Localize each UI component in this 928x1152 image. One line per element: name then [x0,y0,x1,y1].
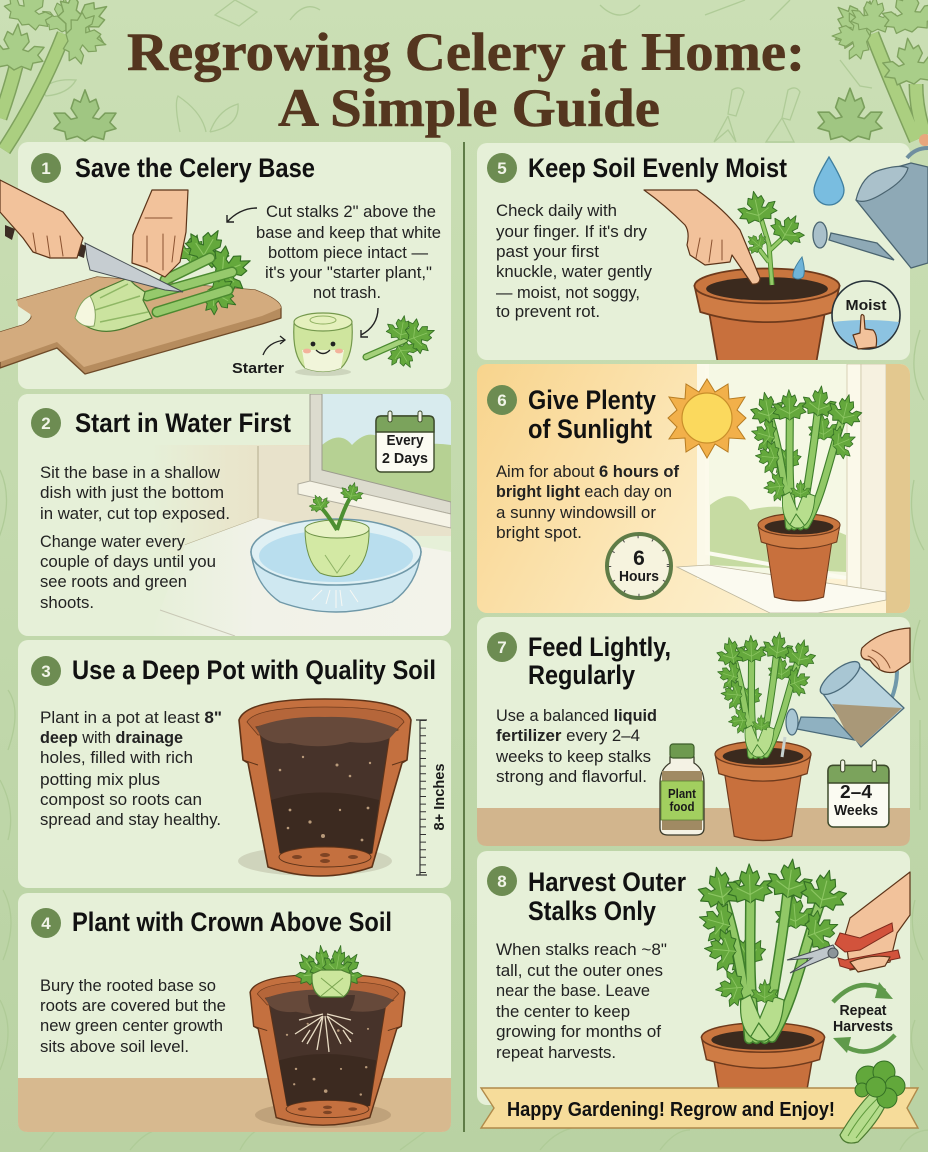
heading 1: Save the Celery Base [75,153,315,183]
panel 8: harvest outer stalks only [477,851,911,1105]
banner: happy gardening: Happy Gardening! Regrow and Enjoy! [507,1099,835,1121]
instruction text 5: — moist, not soggy, [496,283,640,302]
cutaway pot [238,699,411,876]
title: Regrowing Celery at Home: [127,22,805,82]
instruction text 5: to prevent rot. [496,302,600,321]
instruction text 4: roots are covered but the [40,996,226,1015]
starter label [232,336,285,377]
arrow to celery [227,208,257,222]
hand with pruning shears [787,872,910,973]
calendar: every 2 days: Every [386,432,424,449]
hand pointing into soil [644,190,760,284]
instruction text 8: When stalks reach ~8" [496,940,667,959]
heading 3: Use a Deep Pot with Quality Soil [72,655,436,685]
panel 4: plant with crown above soil [18,893,451,1132]
instruction text 2 [40,463,230,612]
pot with rooted crown [250,943,405,1128]
clock: 6 hours: Hours [619,568,659,585]
instruction text 3: compost so roots can [40,790,202,809]
instruction text 4: sits above soil level. [40,1037,189,1056]
clock: 6 hours [607,534,671,598]
instruction text 2: dish with just the bottom [40,483,224,502]
heading 5: Keep Soil Evenly Moist [528,153,787,183]
instruction text 3: spread and stay healthy. [40,810,221,829]
sunny window scene [677,364,910,613]
hand: holding celery [132,190,188,277]
plant food bottle: food [670,799,695,814]
instruction text 1: it's your "starter plant," [265,263,432,282]
hand and fertilizer can [782,628,910,757]
instruction text 3: potting mix plus [40,770,160,789]
badge 2 [31,408,61,438]
instruction text 8: near the base. Leave [496,981,650,1000]
instruction text 3: Plant in a pot at least 8" [40,708,222,727]
instruction text 4 [40,976,226,1056]
heading 7 [528,632,671,690]
badge 7 [487,632,517,662]
instruction text 1: bottom piece intact — [268,243,428,262]
terracotta pot [693,268,841,360]
knife [5,225,183,292]
heading 2: Start in Water First [75,408,291,438]
window scene [18,394,451,636]
celery bunch icon [840,1061,905,1143]
celery plant in pot [748,383,865,601]
instruction text 3: deep with drainage [40,728,183,747]
heading 6: Give Plenty [528,385,656,415]
heading 6 [528,385,656,444]
calendar: every 2 days: 2 Days [382,450,428,467]
large celery in pot [698,858,847,1088]
panel 5: keep soil evenly moist [477,134,928,360]
badge 8 [487,866,517,896]
hand: holding knife [0,180,83,258]
instruction text 8 [496,940,667,1062]
small water drop [793,257,804,279]
instruction text 7: weeks to keep stalks [495,747,651,766]
celery sprig [366,313,440,375]
arrow to starter [361,308,378,337]
heading 8 [528,867,686,926]
celery bunch on board [75,220,259,331]
instruction text 5: your finger. If it's dry [496,222,647,241]
instruction text 6: Aim for about 6 hours of [496,462,679,481]
instruction text 7: fertilizer every 2–4 [496,726,640,745]
instruction text 5: past your first [496,242,599,261]
instruction text 8: growing for months of [496,1022,661,1041]
plant food bottle [660,744,704,835]
calendar: 2-4 weeks: 2–4 [840,782,872,802]
clock: 6 hours: 6 [633,547,645,570]
seedling [735,187,811,285]
heading 8: Stalks Only [528,896,656,926]
instruction text 3 [40,708,222,829]
badge 1 [31,153,61,183]
badge 5: 5 [497,159,507,178]
instruction text 5: Check daily with [496,201,617,220]
calendar: 2-4 weeks [828,760,889,827]
badge 6 [487,385,517,415]
starter label: Starter [232,360,284,377]
title [127,22,805,138]
plant food bottle: Plant [668,786,697,801]
instruction text 2: couple of days until you [40,552,216,571]
instruction text 4: Bury the rooted base so [40,976,216,995]
calendar: every 2 days [376,411,434,472]
instruction text 2: see roots and green [40,572,187,591]
heading 7: Feed Lightly, [528,632,671,662]
instruction text 3: holes, filled with rich [40,748,193,767]
instruction text 8: repeat harvests. [496,1043,616,1062]
table surface [477,808,910,846]
panel 7: feed lightly, regularly [477,617,910,846]
badge 4 [31,908,61,938]
water drop icon [814,157,844,205]
starter celery character [294,313,352,376]
badge 5 [487,153,517,183]
repeat harvests cycle [833,982,895,1053]
instruction text 2: in water, cut top exposed. [40,504,230,523]
instruction text 6: a sunny windowsill or [496,503,656,522]
dish with sprouting base [251,480,421,612]
instruction text 1: Cut stalks 2" above the [266,202,436,221]
panel 3: deep pot with quality soil [18,640,451,888]
panel 6: give plenty of sunlight [477,364,910,613]
instruction text 7: strong and flavorful. [496,767,647,786]
badge 4: 4 [41,914,51,933]
instruction text 4: new green center growth [40,1016,223,1035]
watering can [813,134,928,268]
moist gauge: Moist [846,297,886,314]
badge 3 [31,656,61,686]
instruction text 8: tall, cut the outer ones [496,961,663,980]
instruction text 6: bright light each day on [496,482,672,501]
instruction text 1: base and keep that white [256,223,441,242]
badge 7: 7 [497,638,507,657]
badge 8: 8 [497,872,507,891]
instruction text 2: Sit the base in a shallow [40,463,221,482]
title: A Simple Guide [278,78,660,138]
moist gauge [832,281,900,349]
sun icon [668,379,746,458]
heading 7: Regularly [528,660,635,690]
heading 4: Plant with Crown Above Soil [72,907,392,937]
calendar: 2-4 weeks: Weeks [834,802,878,819]
instruction text 2: Change water every [40,532,185,551]
instruction text 6: bright spot. [496,523,582,542]
instruction text 1: not trash. [313,283,381,302]
cutting board [0,277,281,374]
panel 1: save the celery base [0,142,451,389]
instruction text 5 [496,201,652,321]
repeat harvests cycle: Harvests [833,1018,893,1035]
depth ruler: 8+ Inches [431,764,448,830]
panel 2: start in water first [18,394,451,636]
table surface [18,1078,451,1132]
banner: happy gardening [481,1088,918,1128]
celery plant in pot [714,630,819,841]
instruction text 5: knuckle, water gently [496,262,652,281]
column divider [463,142,465,1132]
instruction text 7: Use a balanced liquid [496,706,657,725]
instruction text 6 [496,462,679,542]
depth ruler [416,720,448,875]
instruction text 2: shoots. [40,593,94,612]
badge 1: 1 [41,159,51,178]
corner celery: top left [0,0,122,150]
badge 6: 6 [497,391,507,410]
instruction text 7 [495,706,657,786]
heading 8: Harvest Outer [528,867,686,897]
heading 6: of Sunlight [528,414,652,444]
corner celery: top right [818,0,928,141]
instruction text 8: the center to keep [496,1002,630,1021]
badge 2: 2 [41,414,51,433]
badge 3: 3 [41,662,51,681]
repeat harvests cycle: Repeat [840,1002,886,1019]
instruction text 1 [256,202,441,302]
